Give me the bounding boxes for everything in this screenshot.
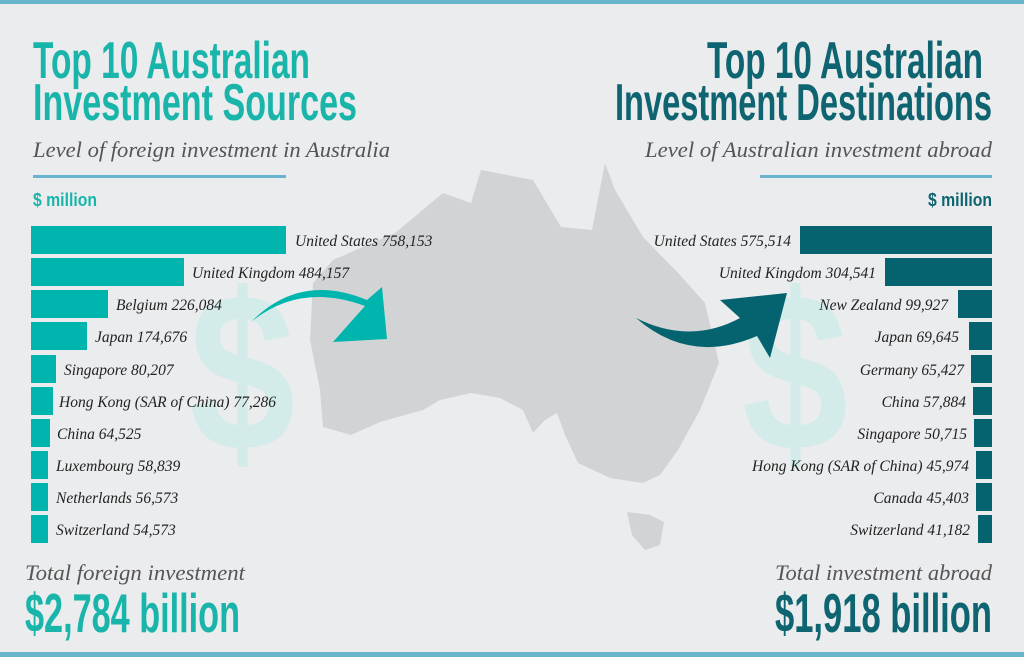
subtitle left: Level of foreign investment in Australia [32,137,390,162]
title left [33,32,357,132]
bar chart: sources: Belgium 226,084 [116,297,222,314]
bar chart: sources: Hong Kong (SAR of China) 77,286 [58,394,276,411]
unit right: $ million [928,190,992,210]
total left: Total foreign investment [25,560,246,585]
bar chart: sources: Singapore 80,207 [64,362,175,379]
bar chart: sources: Japan 174,676 [95,329,187,346]
unit left: $ million [33,190,97,210]
bar chart: destinations [654,226,992,543]
bar chart: destinations: United Kingdom 304,541 [719,265,876,282]
arrow left [251,287,387,342]
total left [25,560,246,644]
map: Australia [310,163,719,550]
bar chart: destinations: New Zealand 99,927 [818,297,949,314]
bar chart: sources: Switzerland 54,573 [56,522,176,539]
bar chart: destinations: China 57,884 [882,394,966,411]
title right [615,32,992,132]
title left: Investment Sources [33,74,357,132]
bar chart: destinations: Germany 65,427 [860,362,965,379]
subtitle right: Level of Australian investment abroad [644,137,993,162]
icon: dollar sign right: $ [742,247,848,498]
bar chart: sources: United Kingdom 484,157 [192,265,350,282]
bar chart: sources: Netherlands 56,573 [55,490,179,507]
icon: dollar sign left: $ [189,247,295,498]
bar chart: destinations: Japan 69,645 [875,329,959,346]
bar chart: destinations: Switzerland 41,182 [850,522,970,539]
bar chart: sources: China 64,525 [57,426,142,443]
total right: Total investment abroad [775,560,993,585]
bar chart: sources: Luxembourg 58,839 [55,458,181,475]
bar chart: destinations: Singapore 50,715 [857,426,967,443]
arrow right [636,293,787,358]
bar chart: sources: United States 758,153 [295,233,433,250]
bar chart: destinations: United States 575,514 [654,233,791,250]
title left: Top 10 Australian [33,32,310,90]
bar chart: sources [31,226,433,543]
total left: $2,784 billion [25,582,240,644]
bar chart: destinations: Hong Kong (SAR of China) 45,974 [751,458,969,475]
bar chart: destinations: Canada 45,403 [873,490,969,507]
total right [775,560,993,644]
